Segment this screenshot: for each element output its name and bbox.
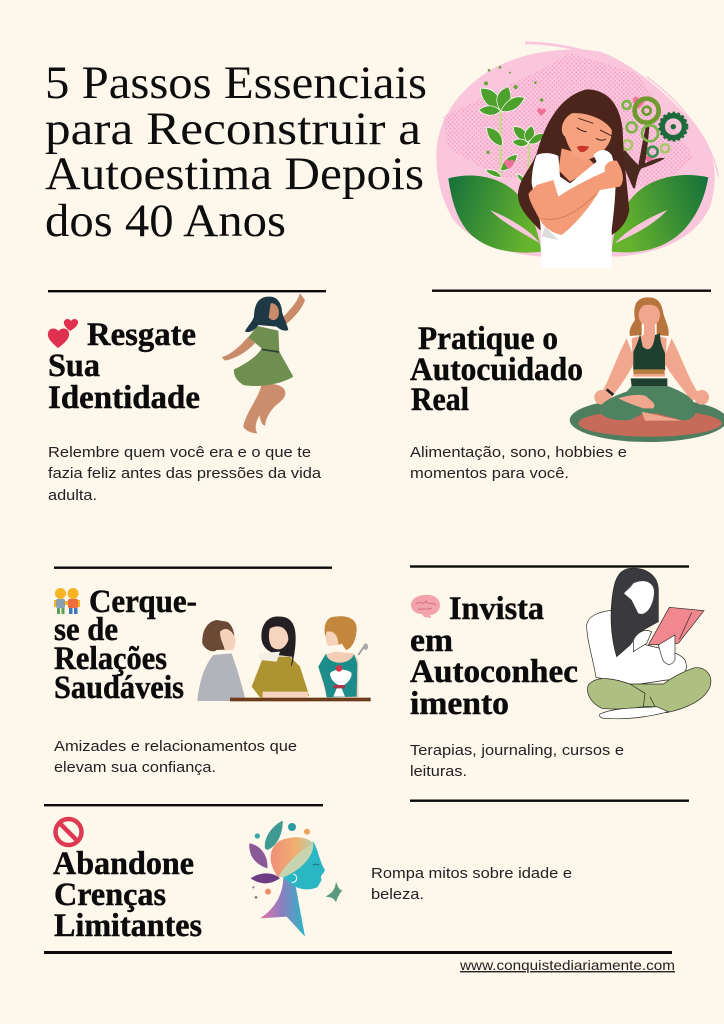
panel: abandone crenças limitantes [44,804,572,944]
title: dos 40 Anos [45,195,286,247]
heading: Abandone [53,846,194,882]
icon: woman profile with leaves [249,821,343,937]
title: 5 Passos Essenciais [45,57,427,109]
heading [53,846,202,944]
heading: Autoconhec [410,654,578,690]
icon: brain [411,595,440,618]
body text [371,865,572,903]
body text: Amizades e relacionamentos que [54,738,297,755]
icon: dancing woman [222,293,305,433]
icon: prohibited sign [56,819,82,845]
bottom rule [410,800,689,802]
body text [48,444,322,504]
icon: two people holding hands [54,588,80,614]
title: Autoestima Depois [45,148,424,200]
footer link: www.conquistediariamente.com [459,957,675,973]
heading: Relações [54,641,167,677]
body text [410,444,627,482]
body text: Rompa mitos sobre idade e [371,865,572,882]
icon: woman meditating on mat [570,297,724,442]
body text: momentos para você. [410,465,569,482]
body text: leituras. [410,763,467,780]
body text: fazia feliz antes das pressões da vida [48,465,322,482]
heading: se de [54,612,118,648]
body text: Alimentação, sono, hobbies e [410,444,627,461]
heading: Identidade [48,380,200,416]
panel: cerque-se de relações saudáveis [54,566,371,776]
body text: Terapias, journaling, cursos e [410,742,624,759]
heading [54,584,197,706]
heading [48,317,200,416]
icon: two hearts [48,319,78,348]
heading: Crenças [54,877,166,913]
top rule [48,290,326,292]
hero illustration: woman hugging herself [436,43,718,268]
heading: imento [410,686,509,722]
top rule [410,565,689,568]
heading: Limitantes [54,908,202,944]
heading [410,321,583,418]
panel: invista em autoconhecimento [410,565,711,802]
body text: Relembre quem você era e o que te [48,444,311,461]
body text [54,738,297,776]
heading: Resgate [87,317,196,353]
heading: Sua [48,348,100,384]
top rule [432,290,711,292]
icon: woman reading a book [587,568,711,719]
panel: resgate sua identidade [48,290,326,504]
heading: em [410,623,453,659]
body text [410,742,624,780]
top rule [44,804,323,806]
footer rule [44,951,672,954]
title: para Reconstruir a [45,103,421,155]
icon: three friends at table [197,616,371,701]
body text: elevam sua confiança. [54,759,216,776]
heading: Pratique o [418,321,558,357]
panel: pratique o autocuidado real [410,290,724,482]
title [45,57,427,247]
heading [410,591,578,722]
heading: Cerque- [89,584,197,620]
heading: Real [411,382,469,418]
body text: beleza. [371,886,424,903]
heading: Saudáveis [54,670,184,706]
body text: adulta. [48,487,97,504]
top rule [54,566,332,569]
heading: Autocuidado [410,352,583,388]
heading: Invista [449,591,544,627]
